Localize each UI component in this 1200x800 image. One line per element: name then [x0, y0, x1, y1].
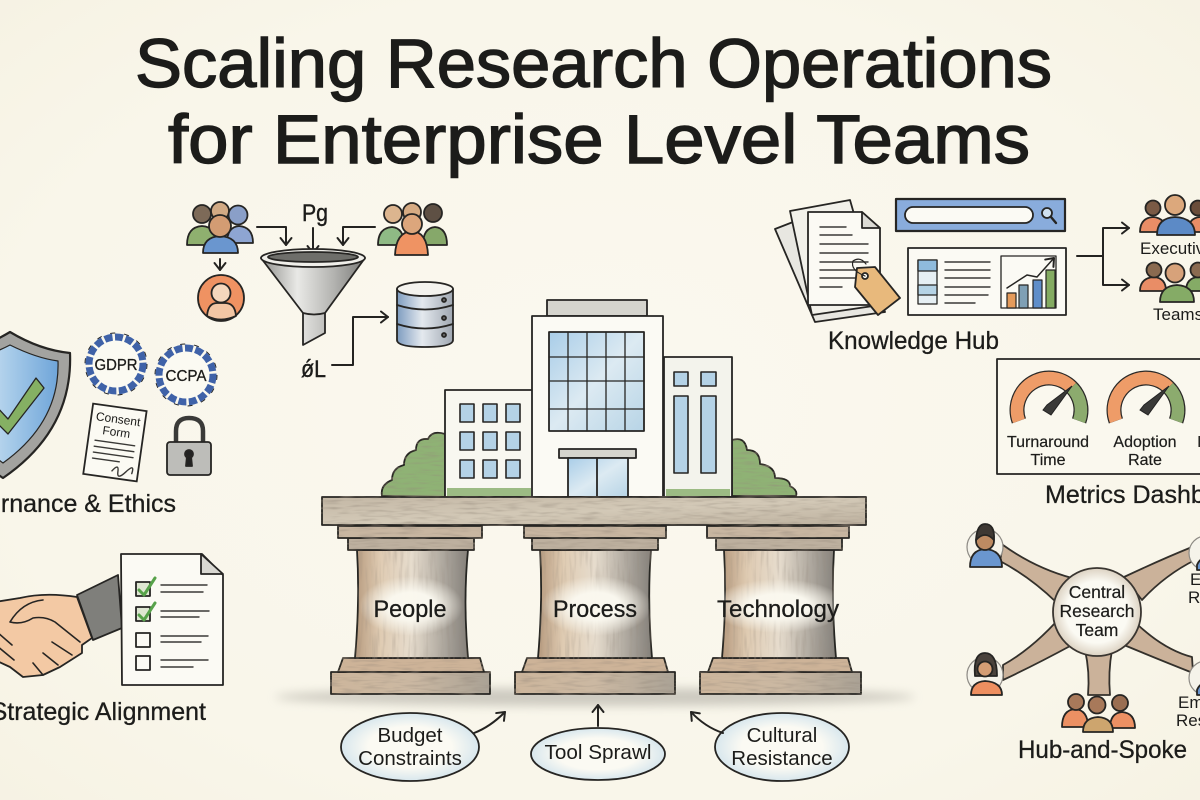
icon: consent form: Form [102, 423, 131, 441]
icon: consent form [83, 404, 147, 481]
gauge label: turnaround time: Time [1031, 452, 1066, 469]
gauge: adoption rate [1114, 378, 1178, 421]
heading: knowledge hub: Knowledge Hub [828, 327, 999, 355]
central research team node [1053, 568, 1141, 656]
spokes [1000, 545, 1195, 695]
pillar label: process: Process [553, 596, 637, 623]
icon: GDPR seal: GDPR [94, 357, 138, 374]
panel: knowledge hub [775, 195, 1200, 355]
panel: data intake funnel [187, 200, 453, 383]
title: for Enterprise Level Teams [168, 101, 1030, 178]
label glow [711, 579, 847, 633]
gauge label: adoption rate: Rate [1128, 452, 1162, 469]
callout: cultural resistance [715, 713, 849, 781]
icon: top-left spoke person [967, 524, 1003, 567]
document lines [820, 227, 868, 287]
ground shadow [275, 688, 915, 706]
slab [322, 497, 866, 525]
icon: tag [852, 259, 900, 315]
right building [664, 357, 732, 497]
central node label: Research [1060, 601, 1134, 621]
funnel input label: Pg [302, 200, 328, 227]
icon: profile badge [198, 275, 244, 321]
callout: tool sprawl: Tool Sprawl [544, 741, 652, 764]
funnel output label: ǿL [301, 356, 326, 383]
icon: CCPA seal [155, 344, 217, 406]
callout: tool sprawl [531, 728, 665, 780]
arrows into funnel [220, 227, 375, 270]
panel: governance and ethics [0, 332, 217, 518]
pillar: people [331, 526, 490, 694]
title [135, 25, 1052, 178]
dashboard frame [997, 359, 1200, 474]
pillar label: people: People [374, 596, 446, 623]
heading: hub-and-spoke: Hub-and-Spoke [1018, 736, 1187, 764]
callout: budget constraints: Constraints [358, 747, 462, 770]
main tower [532, 300, 663, 497]
callout: budget constraints: Budget [378, 724, 443, 747]
icon: checklist [121, 554, 223, 685]
icon: executives [1140, 195, 1200, 235]
label glow [541, 576, 651, 636]
icon: CCPA seal: CCPA [166, 368, 207, 385]
icon: consent form: Consent [95, 409, 142, 429]
icon: shield [0, 332, 70, 478]
pillar: technology [700, 526, 861, 694]
central node label: Central [1069, 582, 1125, 602]
gauge label: turnaround time: Turnaround [1007, 434, 1089, 451]
left building [445, 390, 533, 497]
search bar [896, 199, 1065, 231]
gauge: turnaround time [1017, 378, 1081, 421]
icon: funnel [261, 249, 365, 345]
pillar: process [515, 526, 675, 694]
icon: teams [1140, 262, 1200, 302]
icon: right spoke people [1189, 536, 1200, 695]
icon: left participant group [187, 202, 253, 253]
arrows to audiences [1077, 228, 1129, 285]
icon: handshake [0, 575, 122, 677]
icon: buildings [382, 300, 796, 497]
icon: database [397, 282, 453, 347]
icon: bottom-left spoke person [967, 653, 1003, 695]
icon: document stack [775, 200, 885, 322]
panel: hub and spoke [967, 524, 1200, 764]
icon: right participant group [378, 203, 447, 255]
callout: budget constraints [341, 713, 479, 781]
callout: cultural resistance: Cultural [747, 724, 817, 747]
arrows: pressures on foundation [474, 705, 723, 733]
title: Scaling Research Operations [135, 25, 1052, 102]
callout: cultural resistance: Resistance [731, 747, 833, 770]
gauge label: adoption rate: Adoption [1113, 434, 1177, 451]
icon: padlock [167, 418, 211, 475]
pillar label: technology: Technology [717, 596, 839, 623]
bushes [382, 433, 796, 497]
icon: GDPR seal [85, 333, 147, 395]
panel: central temple [275, 300, 915, 781]
panel: metrics dashboard [997, 359, 1200, 509]
panel: strategic alignment [0, 554, 223, 726]
central node label: Team [1076, 620, 1118, 640]
icon: bottom spoke team [1062, 694, 1135, 732]
report dashboard [908, 248, 1066, 315]
arrow to database [332, 317, 388, 365]
label glow [359, 576, 463, 636]
